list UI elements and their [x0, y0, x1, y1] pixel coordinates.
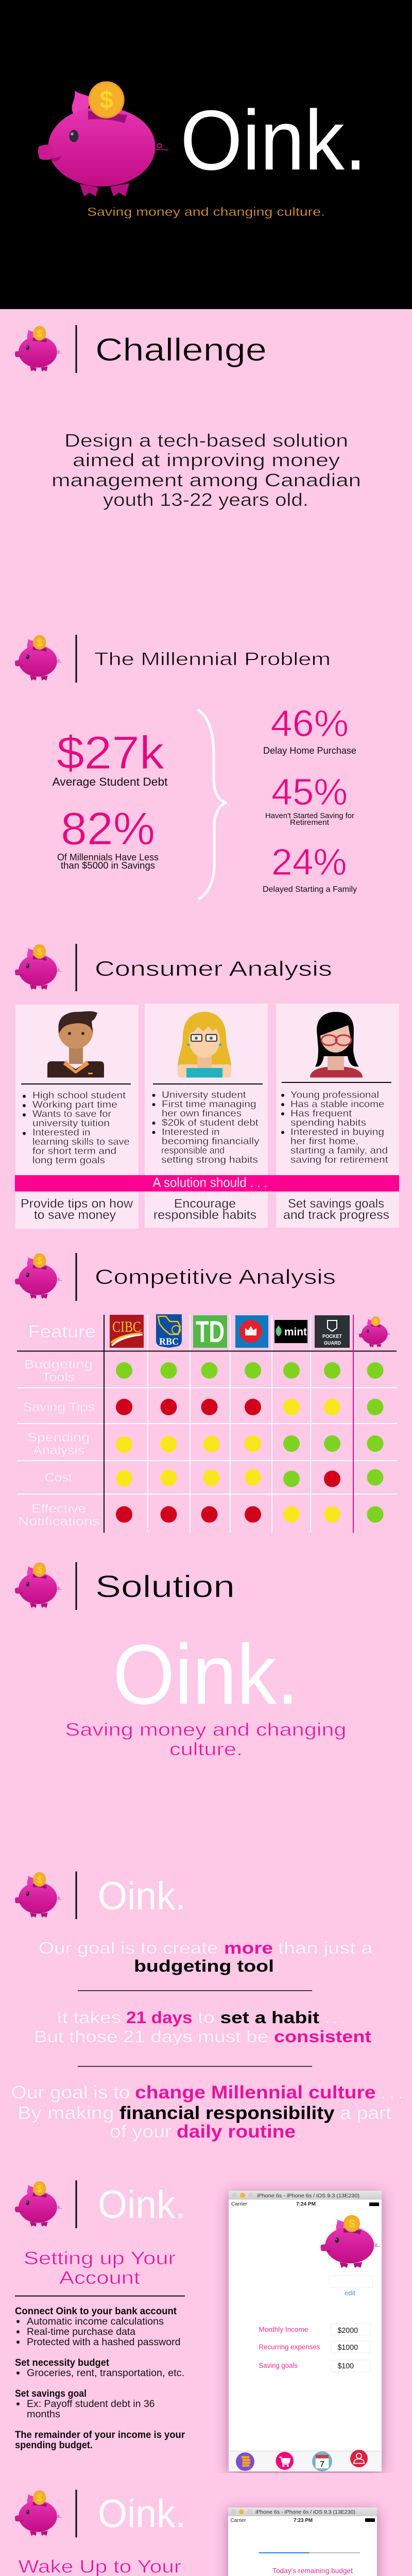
bullet list: for short term and	[32, 1146, 116, 1156]
icon: pig	[15, 2181, 62, 2227]
statement: change millennial culture: financial responsibility	[119, 2103, 335, 2123]
bullet list: First time managing	[162, 1099, 256, 1109]
stat: home purchase: Delay Home Purchase	[263, 745, 356, 756]
stat: savings	[57, 803, 159, 871]
rule	[15, 2296, 185, 2297]
illustration: student	[47, 1011, 104, 1078]
row: effective notifications	[18, 1502, 383, 1529]
logo: CIBC	[110, 1315, 144, 1348]
divider	[75, 944, 77, 991]
logo: RBC	[156, 1314, 182, 1348]
divider	[75, 2180, 77, 2228]
solution card 1	[15, 1192, 139, 1229]
bullet list: Interested in buying	[290, 1127, 384, 1137]
bullet list: Working part time	[32, 1099, 117, 1110]
solution card 1: to save money	[34, 1208, 116, 1222]
wordmark: Oink.	[98, 1874, 186, 1918]
row: spending analysis: Analysis	[33, 1444, 84, 1458]
banner: a solution should	[15, 1175, 399, 1191]
challenge statement: aimed at improving money	[73, 450, 340, 470]
icon: user tab	[350, 2450, 368, 2467]
persona card: high school student	[15, 1005, 139, 1175]
row: saving tips	[23, 1399, 383, 1415]
bullet list: saving for retirement	[290, 1155, 388, 1165]
rule	[153, 1083, 263, 1084]
panel: the millennial problem	[15, 635, 357, 900]
statement: 21 days: It takes	[57, 2008, 121, 2027]
solution card 3: Set savings goals	[288, 1197, 384, 1211]
heading: The Millennial Problem	[94, 649, 331, 669]
stat: family	[263, 842, 357, 894]
bullet list	[152, 1090, 260, 1165]
bullet list: Wants to save for	[32, 1109, 111, 1119]
statement: 21 days: .	[372, 2027, 377, 2046]
icon: pig	[15, 1872, 62, 1918]
panel: cover	[0, 0, 412, 309]
bullet list: $20k of student debt	[162, 1117, 259, 1128]
stat: savings: Of Millennials Have Less	[57, 852, 159, 862]
feature text: Set savings goal	[15, 2388, 87, 2399]
logo: TD: TD	[196, 1315, 225, 1349]
rule	[282, 1082, 391, 1083]
tagline: Saving money and changing culture.	[87, 205, 325, 218]
stat: retirement: 45%	[271, 772, 348, 813]
bullet list: her own finances	[162, 1108, 242, 1118]
feature text	[15, 2306, 185, 2451]
statement: more than a budgeting tool: budgeting tool	[134, 1957, 274, 1975]
row: spending analysis	[27, 1431, 383, 1458]
logo: mint: mint	[284, 1326, 307, 1338]
heading: Consumer Analysis	[95, 957, 332, 980]
panel: competitive analysis	[15, 1253, 397, 1533]
stat: retirement: Haven't Started Saving for	[265, 811, 354, 820]
stat: family: Delayed Starting a Family	[263, 885, 357, 894]
icon: pig	[15, 326, 62, 371]
row: cost: Cost	[45, 1471, 72, 1485]
statement: more than a budgeting tool: .	[274, 1957, 279, 1975]
stat: retirement: Retirement	[290, 818, 330, 827]
illustration: university student	[178, 1012, 231, 1078]
phone screenshot: account setup: Carrier	[231, 2201, 248, 2207]
illustration: professional	[310, 1012, 363, 1078]
tagline: Saving money and changing	[65, 1720, 346, 1740]
statement: change millennial culture: daily routine	[177, 2122, 296, 2142]
solution card 3: and track progress	[283, 1208, 389, 1222]
icon: pig	[15, 2490, 62, 2536]
divider	[75, 325, 77, 373]
statement: change millennial culture: By making	[18, 2103, 114, 2123]
statement: more than a budgeting tool: than just a	[278, 1939, 373, 1957]
row: cost	[45, 1469, 383, 1487]
rule	[21, 1083, 131, 1084]
logo: Pocket Guard: GUARD	[324, 1341, 341, 1346]
bullet list: starting a family, and	[290, 1145, 388, 1156]
stat: retirement	[265, 772, 354, 827]
logo: Pocket Guard: POCKET	[322, 1334, 342, 1340]
icon: piggy bank logo	[38, 81, 168, 196]
statement: change millennial culture: change Millennial culture	[135, 2082, 376, 2103]
bullet list: responsible and	[161, 1145, 225, 1156]
stat: savings: than $5000 in Savings	[61, 860, 155, 871]
solution card 2: Encourage	[174, 1197, 236, 1211]
stat: home purchase	[263, 703, 356, 756]
statement: 21 days: But those 21 days must be	[34, 2027, 268, 2046]
divider	[75, 2489, 77, 2537]
bullet list: long term goals	[32, 1155, 105, 1165]
phone screenshot: account setup: Monthly Income	[259, 2325, 308, 2333]
statement: 21 days: . . .	[325, 2008, 345, 2027]
solution card 2: responsible habits	[153, 1208, 256, 1222]
wordmark: Oink.	[113, 1627, 299, 1722]
row: effective notifications: Effective	[31, 1502, 86, 1516]
phone screenshot: daily budget: 7:23 PM	[294, 2518, 313, 2523]
icon: pig	[15, 1563, 62, 1608]
persona card: young professional	[276, 1004, 399, 1175]
panel: challenge	[15, 325, 361, 510]
statement: 21 days	[34, 2008, 377, 2046]
bullet list: setting strong habits	[161, 1155, 258, 1165]
phone screenshot: daily budget: Today's remaining budget	[272, 2567, 353, 2575]
stat: home purchase: 46%	[271, 703, 349, 744]
wordmark: Oink.	[98, 2492, 186, 2536]
phone screenshot: account setup: edit	[345, 2289, 355, 2297]
icon: pig	[15, 944, 62, 990]
heading: Challenge: Challenge	[95, 332, 267, 368]
panel: goals	[11, 1871, 403, 2142]
row: budgeting tools: Tools	[42, 1370, 75, 1384]
wordmark: Oink.	[98, 2183, 186, 2227]
feature text: Automatic income calculations	[27, 2316, 164, 2327]
feature text: Groceries, rent, transportation, etc.	[27, 2368, 184, 2379]
solution card 1: Provide tips on how	[21, 1197, 133, 1211]
challenge statement	[52, 431, 361, 510]
heading: Solution	[95, 1569, 235, 1604]
solution card 2	[145, 1192, 268, 1228]
tagline	[65, 1720, 346, 1759]
phone screenshot: daily budget: iPhone 6s - iPhone 6s / iOS 9.3 (13E230)	[255, 2510, 355, 2515]
phone screenshot: account setup: Saving goals	[259, 2361, 298, 2369]
banner: a solution should: A solution should . . .	[152, 1175, 267, 1190]
feature text: Ex: Payoff student debt in 36	[27, 2399, 154, 2410]
bullet list	[281, 1090, 388, 1165]
panel: consumer analysis	[15, 944, 399, 1229]
icon: cart tab	[276, 2452, 294, 2470]
statement: change millennial culture: .	[296, 2122, 301, 2142]
statement: 21 days: consistent	[274, 2027, 371, 2046]
phone screenshot: account setup: 7:24 PM	[296, 2201, 316, 2207]
feature text: Connect Oink to your bank account	[15, 2306, 177, 2317]
divider	[75, 635, 77, 683]
row: saving tips: Saving Tips	[23, 1400, 95, 1414]
challenge statement: youth 13-22 years old.	[103, 490, 308, 510]
statement: 21 days: to	[198, 2008, 215, 2027]
bullet list: Has a stable income	[290, 1099, 384, 1109]
feature text: months	[27, 2409, 60, 2420]
statement: change millennial culture: of your	[110, 2122, 171, 2142]
statement: more than a budgeting tool	[39, 1939, 373, 1975]
statement: 21 days: 21 days	[126, 2008, 193, 2027]
challenge statement: management among Canadian	[52, 470, 361, 490]
bullet list: spending habits	[290, 1117, 366, 1128]
icon: pig	[15, 635, 62, 681]
feature text: The remainder of your income is your	[15, 2430, 185, 2441]
logo: Pocket Guard	[315, 1315, 350, 1348]
logo: CIBC: CIBC	[112, 1318, 141, 1335]
logo: BMO	[235, 1315, 268, 1348]
statement: more than a budgeting tool: more	[224, 1939, 273, 1957]
tagline: culture.	[169, 1739, 243, 1759]
phone screenshot: account setup: Recurring expenses	[259, 2343, 320, 2351]
phone screenshot: account setup	[229, 2191, 382, 2475]
statement: more than a budgeting tool: Our goal is to create	[39, 1939, 218, 1957]
row: budgeting tools	[24, 1358, 383, 1384]
phone screenshot: account setup: iPhone 6s - iPhone 6s / iOS 9.3 (13E230)	[257, 2193, 359, 2199]
phone screenshot: daily budget: Carrier	[231, 2518, 246, 2523]
bullet list: University student	[162, 1090, 246, 1100]
stat: student debt: $27k	[57, 727, 165, 779]
stat: student debt: Average Student Debt	[53, 775, 168, 788]
bullet list: university tuition	[32, 1118, 110, 1128]
comparison table	[17, 1314, 397, 1533]
header: Feature: Feature	[28, 1322, 96, 1342]
icon: pig	[320, 2215, 380, 2268]
icon: calendar tab	[312, 2451, 332, 2471]
feature text: spending budget.	[15, 2440, 93, 2451]
statement: change millennial culture: a part	[340, 2103, 391, 2123]
divider	[75, 1253, 77, 1301]
phone screenshot: account setup: $2000	[338, 2326, 358, 2335]
statement: change millennial culture	[11, 2082, 403, 2142]
solution card 3	[276, 1192, 399, 1228]
brace	[198, 709, 227, 900]
bullet list: Interested in	[162, 1127, 219, 1137]
statement: change millennial culture: Our goal is to	[11, 2082, 130, 2103]
bullet list	[23, 1090, 129, 1165]
panel: daily budget	[15, 2489, 377, 2576]
bullet list: her first home,	[290, 1136, 358, 1146]
feature text: Real-time purchase data	[27, 2327, 135, 2337]
feature text: Set necessity budget	[15, 2358, 110, 2368]
row: spending analysis: Spending	[27, 1431, 90, 1445]
stat: family: 24%	[271, 842, 347, 883]
divider	[75, 1562, 77, 1610]
panel: setting up your account	[15, 2180, 382, 2475]
phone screenshot: account setup: $1000	[338, 2343, 358, 2352]
challenge statement: Design a tech-based solution	[64, 431, 348, 451]
phone screenshot: daily budget	[228, 2507, 377, 2576]
statement: change millennial culture: . . .	[381, 2082, 403, 2103]
icon: coins tab	[236, 2452, 254, 2471]
icon: pig	[15, 1253, 62, 1299]
stat: savings: 82%	[61, 803, 155, 854]
phone screenshot: account setup: $100	[338, 2362, 354, 2370]
panel: solution	[15, 1562, 347, 1759]
logo: RBC: RBC	[159, 1336, 179, 1347]
heading	[24, 2248, 176, 2288]
bullet list: High school student	[32, 1090, 126, 1100]
title: Oink: Oink.	[180, 93, 367, 188]
divider	[75, 1871, 77, 1919]
statement: 21 days: set a habit	[220, 2008, 319, 2027]
bullet list: Young professional	[290, 1090, 379, 1100]
logo: Oink pig	[359, 1316, 391, 1347]
heading: Competitive Analysis	[95, 1266, 336, 1289]
feature text: Protected with a hashed password	[27, 2337, 180, 2348]
rule	[78, 1990, 312, 1991]
heading: Account	[59, 2268, 140, 2288]
bullet list: Has frequent	[290, 1108, 352, 1118]
logo: mint	[274, 1320, 307, 1343]
heading: Setting up Your	[24, 2248, 176, 2268]
bullet list: becoming financially	[162, 1136, 260, 1146]
bullet list: Interested in	[32, 1127, 91, 1138]
row: budgeting tools: Budgeting	[24, 1358, 93, 1371]
rule	[78, 2066, 312, 2067]
row: effective notifications: Notifications	[18, 1515, 100, 1529]
persona card: university student	[145, 1004, 268, 1175]
bullet list: learning skills to save	[32, 1137, 129, 1147]
